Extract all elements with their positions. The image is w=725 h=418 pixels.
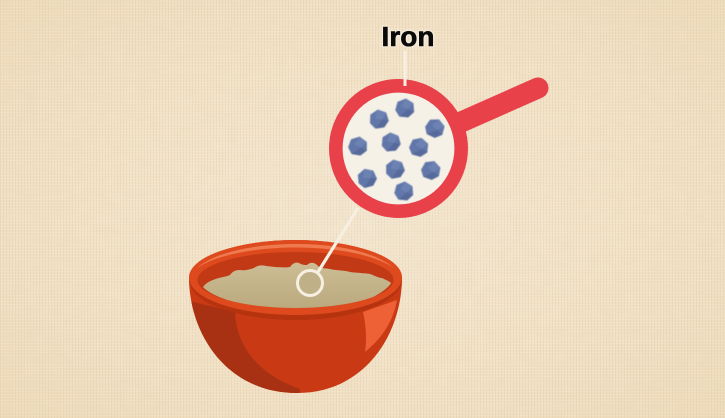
label: Iron: Iron bbox=[382, 21, 434, 52]
leader line: label to magnifier bbox=[404, 51, 406, 86]
bowl right highlight bbox=[363, 300, 397, 352]
iron particles bbox=[347, 98, 448, 201]
magnifier handle bbox=[450, 88, 538, 127]
bowl body bbox=[189, 277, 402, 393]
label: Iron: Iron bbox=[382, 21, 434, 52]
magnifier lens bbox=[336, 86, 461, 211]
bowl interior bbox=[198, 252, 394, 308]
rim top highlight bbox=[197, 244, 394, 268]
magnifier bbox=[336, 86, 538, 211]
bowl bbox=[185, 240, 402, 400]
bowl left shadow bbox=[191, 302, 300, 393]
bowl rim bbox=[189, 240, 402, 320]
food: oatmeal bbox=[203, 263, 391, 312]
leader line: magnifier to bowl bbox=[318, 208, 358, 272]
callout ring on food bbox=[298, 270, 322, 296]
